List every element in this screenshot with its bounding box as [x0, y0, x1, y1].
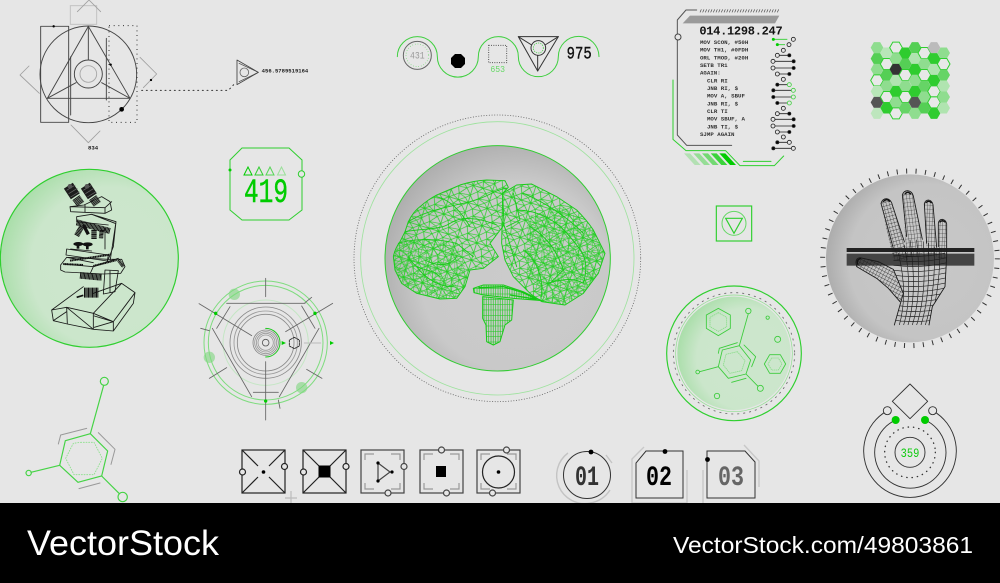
wave readout strip: 431, 653, 975	[397, 36, 599, 77]
scan bars	[847, 248, 974, 266]
hand scan sphere	[823, 171, 997, 346]
icon: inverted triangle with circle	[518, 37, 558, 71]
code listing: JNB TI, $	[707, 123, 739, 130]
watermark footer bar	[0, 503, 1000, 583]
code listing: MOV A, SBUF	[707, 93, 746, 100]
sacred geometry diagram with readouts: 456.5789519164	[262, 67, 309, 74]
code listing: MOV SBUF, A	[707, 116, 746, 123]
code listing: SETB TR1	[700, 62, 728, 69]
central brain sphere	[354, 115, 641, 402]
code listing: MOV TH1, #0FDH	[700, 47, 749, 54]
wireframe brain	[390, 177, 610, 345]
terminal number: 014.1298.247	[699, 25, 783, 39]
gauge: 359	[864, 384, 956, 497]
code listing: JNB RI, $	[707, 85, 739, 92]
microscope drawing: stage and base	[52, 255, 135, 331]
sacred geometry diagram with readouts	[20, 0, 309, 152]
icon: square with small block	[420, 447, 463, 496]
badge: 02	[632, 447, 687, 503]
DNA strand	[771, 37, 795, 150]
microscope sphere	[0, 169, 178, 347]
petri dish with molecules	[667, 286, 801, 421]
code listing: MOV SCON, #50H	[700, 39, 749, 46]
icon: triangle target	[237, 60, 258, 85]
code listing: ORL TMOD, #20H	[700, 54, 749, 61]
badge: 01: 01	[575, 463, 599, 494]
code listing: JNB RI, $	[707, 100, 739, 107]
badge: 419 counter	[228, 148, 305, 220]
reticle target dial	[199, 278, 334, 420]
icon: square with triangle	[361, 450, 407, 496]
icon: square with cross and dot	[240, 450, 297, 503]
molecule bottom left	[26, 377, 127, 502]
code listing: CLR TI	[707, 108, 728, 115]
icon: square with solid centre	[300, 450, 349, 493]
code listing: SJMP AGAIN	[700, 131, 735, 138]
wireframe hand	[854, 190, 948, 325]
icon: square with circle	[477, 447, 520, 496]
code listing: CLR RI	[707, 77, 728, 84]
code terminal panel with DNA strand	[673, 9, 795, 166]
microscope drawing: head and objectives	[66, 184, 116, 262]
hexagon heat grid	[871, 42, 950, 119]
wave readout strip: 431, 653, 975: 431	[410, 51, 425, 62]
wave readout strip: 431, 653, 975: 653	[490, 65, 505, 75]
image id: VectorStock.com/49803861	[673, 532, 973, 558]
badge: 03	[703, 445, 759, 503]
wave readout strip: 431, 653, 975: 975	[567, 45, 592, 64]
sacred geometry diagram with readouts: 834	[88, 145, 99, 152]
code listing: AGAIN:	[700, 70, 721, 77]
badge: 02: 02	[646, 463, 672, 494]
badge: 03: 03	[718, 463, 744, 494]
logo wordmark: VectorStock	[27, 524, 220, 563]
badge: 01	[557, 450, 612, 504]
gauge: 359: 359	[901, 447, 919, 462]
badge: 419 counter: 419	[244, 175, 288, 213]
icon: green framed triangle	[716, 206, 752, 241]
code listing	[700, 39, 749, 138]
